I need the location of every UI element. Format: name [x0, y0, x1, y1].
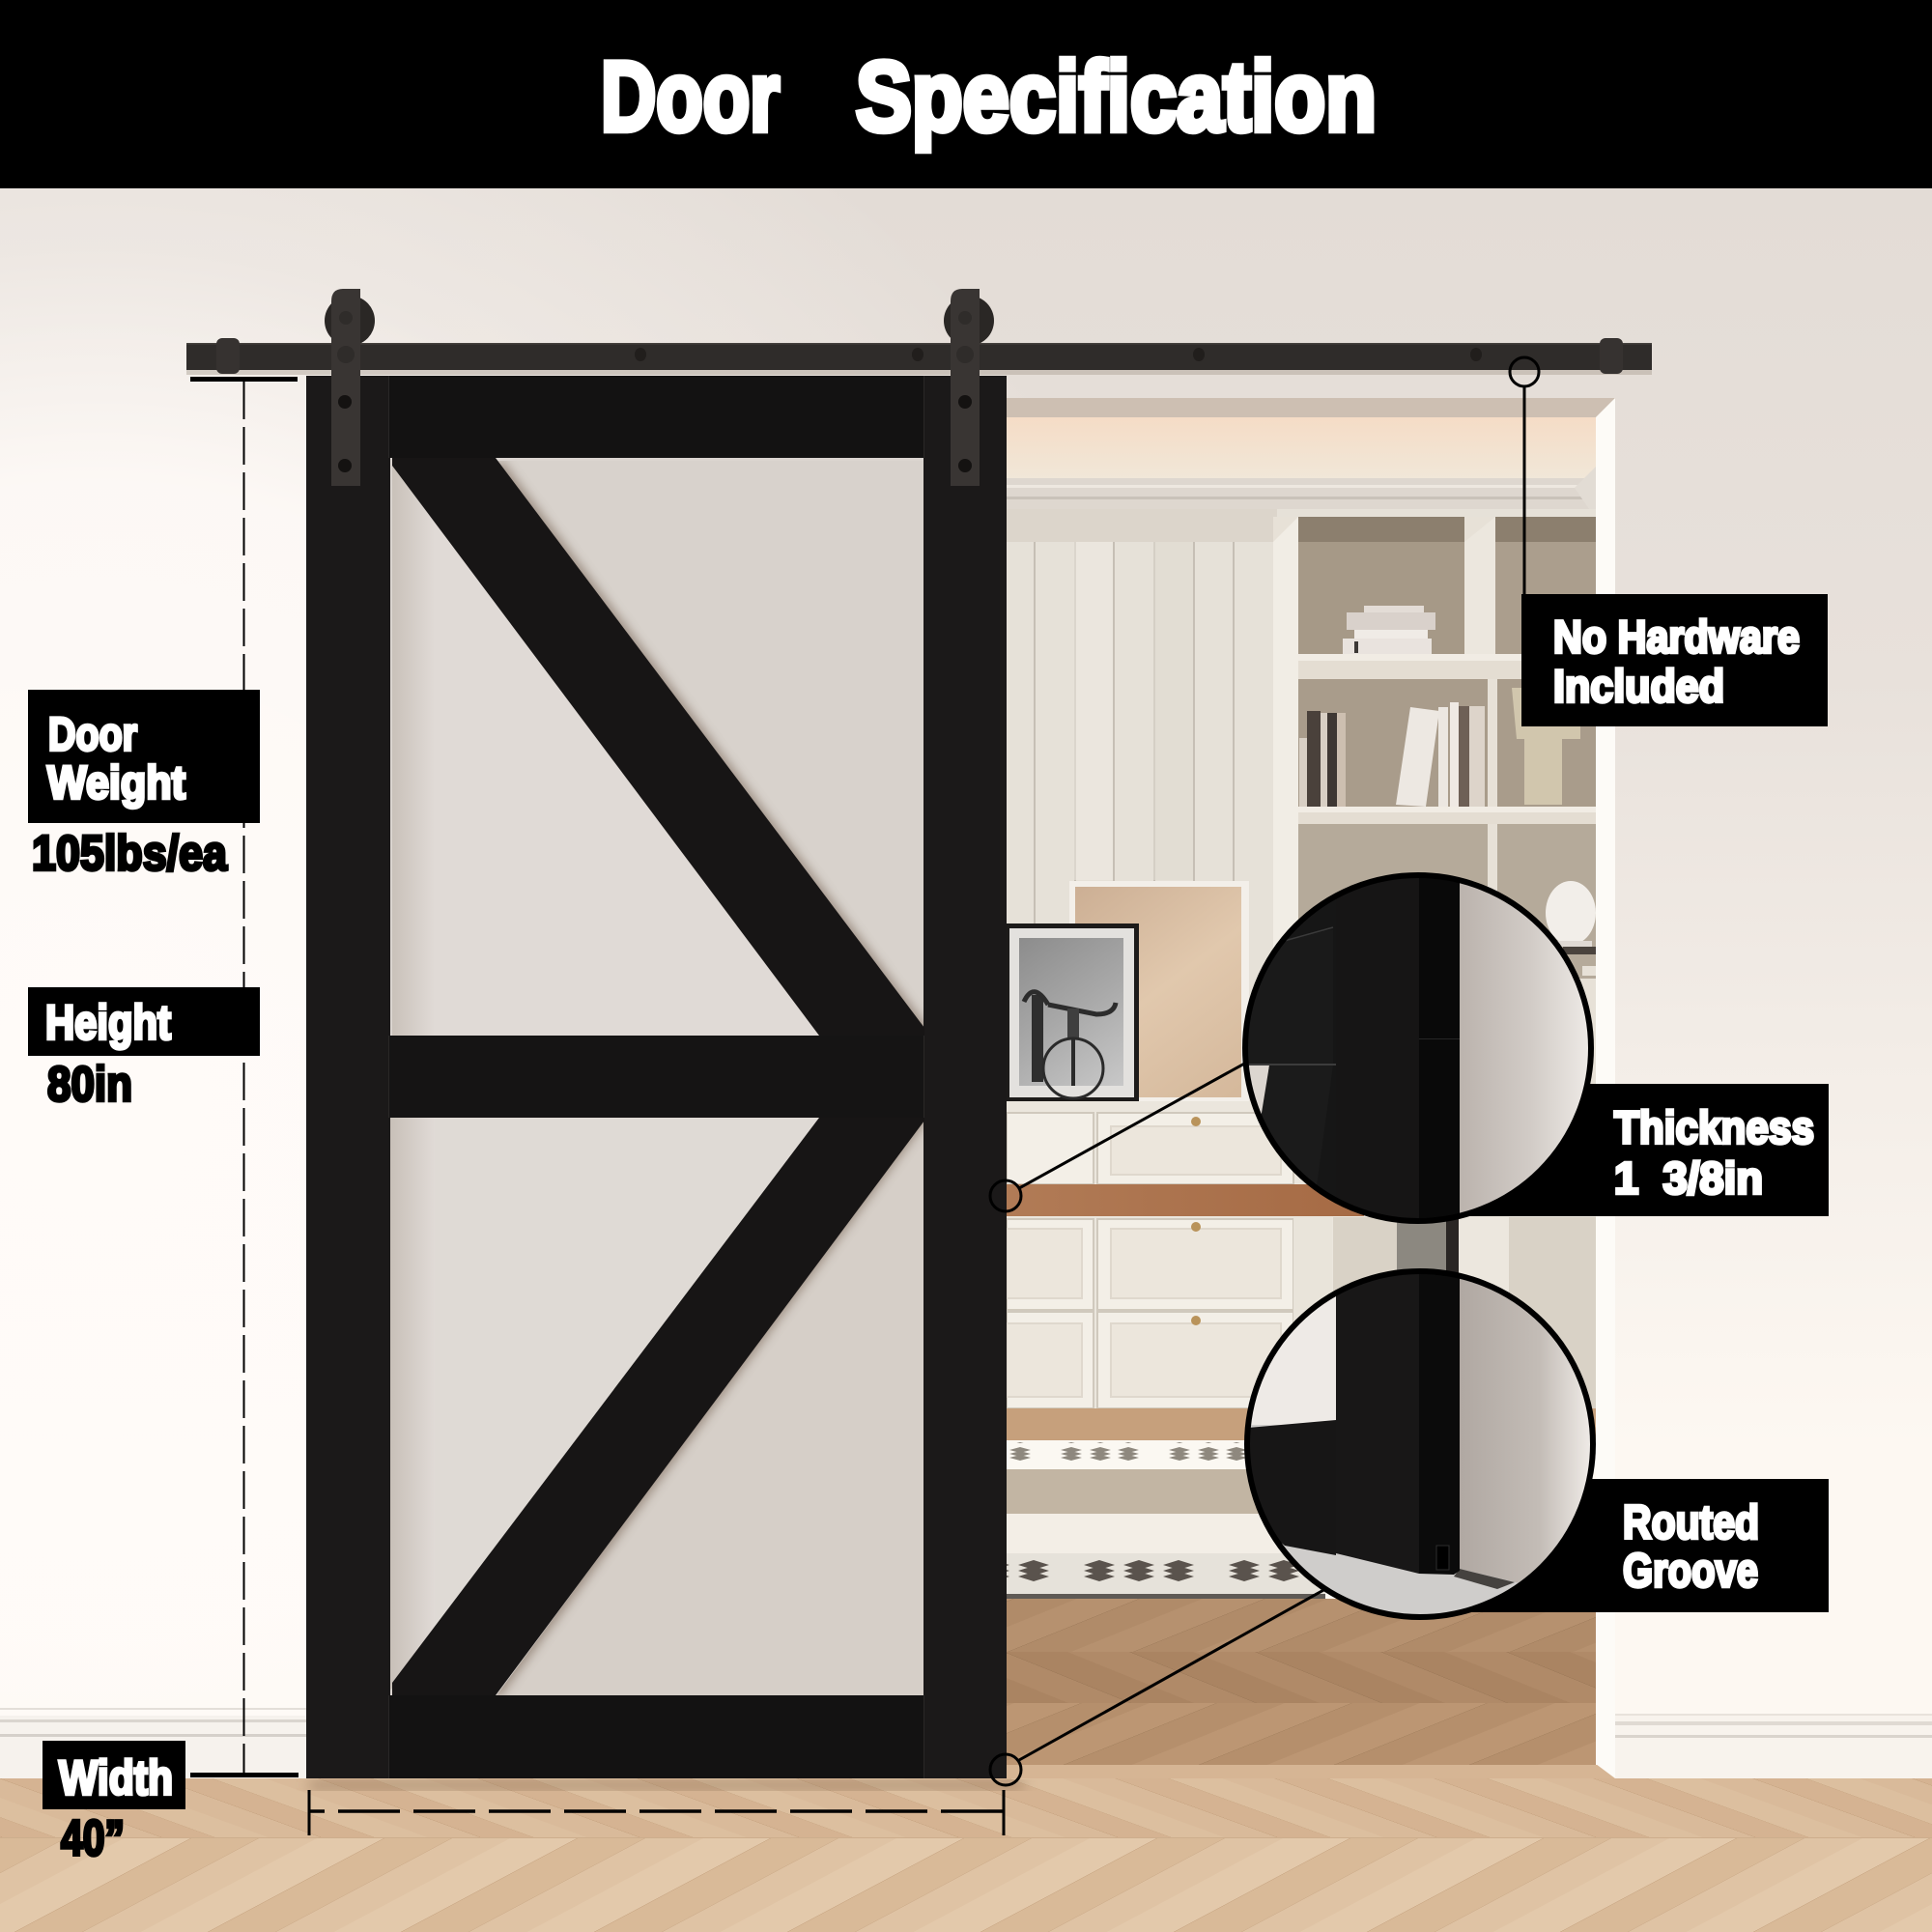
panel: upper-right triangle of upper section	[493, 461, 927, 1036]
title: Specification	[856, 42, 1377, 152]
callout: height: Height	[45, 995, 171, 1049]
title: Door	[601, 42, 780, 152]
herringbone floor	[0, 1599, 1932, 1932]
right wall baseboard and door jamb	[1596, 398, 1932, 1778]
magnifier: door thickness detail	[1236, 869, 1604, 1227]
panel: lower-right triangle of lower section	[493, 1111, 927, 1697]
leader to track	[1510, 357, 1539, 595]
callout: door weight	[28, 690, 260, 823]
sculpture	[1512, 688, 1580, 805]
callout: routed groove	[1449, 1479, 1829, 1612]
rug	[1007, 1440, 1325, 1599]
upright books	[1299, 702, 1485, 807]
callout: door weight: Weight	[47, 757, 185, 810]
callout: door weight: Door	[48, 709, 137, 761]
value: door weight: 105lbs/ea	[32, 825, 228, 881]
diagonal braces	[392, 458, 924, 1695]
hanger left	[325, 289, 375, 486]
soffit	[1007, 398, 1615, 417]
panel: upper-left triangle of lower section	[390, 1118, 413, 1690]
callout: routed groove: Routed	[1623, 1497, 1759, 1549]
walnut counter	[1007, 1184, 1364, 1216]
value: width: 40”	[61, 1810, 125, 1866]
bookcase	[1273, 517, 1596, 1125]
leader: thickness marker	[990, 1063, 1246, 1211]
header band	[0, 0, 1932, 188]
barn door	[306, 376, 1007, 1778]
paneled wall	[1007, 509, 1596, 1127]
door stiles	[306, 376, 1007, 1778]
callout: thickness	[1449, 1084, 1829, 1216]
room floor	[1007, 1408, 1596, 1440]
crown molding	[1007, 467, 1596, 509]
magnifier: routed groove detail	[1244, 1268, 1596, 1620]
leaning art print	[1069, 881, 1249, 1101]
track stops	[216, 338, 1623, 374]
callout: thickness: 1 3/8in	[1614, 1153, 1763, 1204]
vase	[1546, 881, 1596, 954]
panel: lower-left triangle of upper section	[392, 466, 413, 1036]
left baseboard	[0, 1708, 307, 1778]
callout: width: Width	[59, 1750, 173, 1804]
value: height: 80in	[47, 1057, 132, 1111]
callout: routed groove: Groove	[1623, 1546, 1758, 1598]
room seen through the doorway	[1006, 398, 1615, 1599]
callout: width	[43, 1741, 185, 1809]
sliding track and hangers	[186, 289, 1652, 486]
callout: no hardware: Included	[1553, 661, 1724, 711]
stacked books	[1343, 606, 1435, 654]
callout: thickness: Thickness	[1614, 1101, 1814, 1153]
cove lighting	[1007, 417, 1596, 478]
title	[601, 42, 1377, 152]
hanger right	[944, 289, 994, 486]
framed bicycle photo	[1006, 923, 1139, 1101]
lower cabinets	[1007, 1101, 1596, 1439]
door panels	[390, 458, 927, 1699]
track rail	[186, 343, 1652, 375]
callout: no hardware: No Hardware	[1553, 611, 1800, 663]
width dimension line	[307, 1790, 1005, 1835]
leader: groove marker	[990, 1589, 1325, 1785]
callout: height	[28, 987, 260, 1056]
height dimension line	[190, 377, 298, 1777]
callout: no hardware	[1510, 357, 1828, 726]
door rails	[388, 376, 923, 1778]
